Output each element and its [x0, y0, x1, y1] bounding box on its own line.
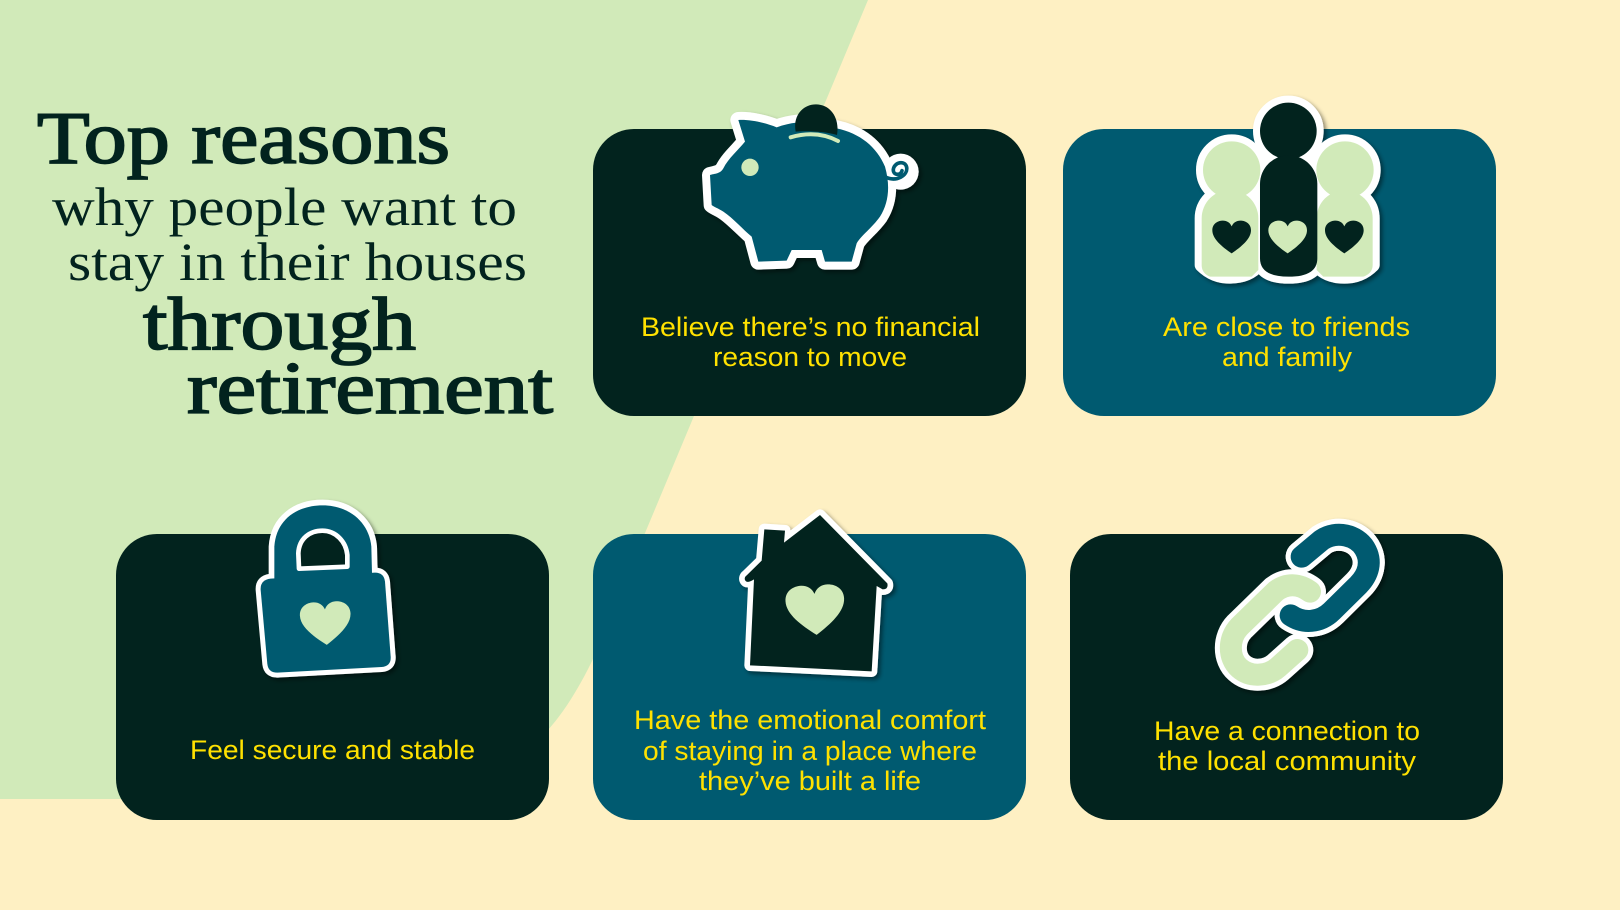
icon: house with heart	[745, 515, 888, 671]
icon: padlock with heart	[261, 505, 391, 673]
card text: reason to move	[713, 342, 907, 372]
title: retirement	[187, 348, 554, 430]
title	[37, 98, 554, 430]
icon: chain links	[1231, 535, 1369, 675]
card text: Feel secure and stable	[190, 735, 475, 765]
panel: close to friends and family	[1063, 103, 1496, 416]
title: Top reasons	[37, 98, 450, 180]
icon: family of three	[1202, 103, 1374, 277]
card text	[641, 312, 980, 372]
card text: the local community	[1158, 746, 1417, 776]
card text: Are close to friends	[1163, 312, 1410, 342]
card text: Believe there’s no financial	[641, 312, 980, 342]
panel: no financial reason to move	[593, 104, 1026, 416]
panel: connection to local community	[1070, 534, 1503, 820]
card text: of staying in a place where	[643, 736, 977, 766]
card text	[1154, 716, 1420, 776]
background: green shape	[0, 0, 868, 799]
title: stay in their houses	[68, 232, 527, 292]
title: through	[143, 283, 416, 366]
card text: Have the emotional comfort	[634, 705, 987, 735]
card text	[634, 705, 987, 796]
card text	[1163, 312, 1410, 372]
title: why people want to	[52, 177, 517, 237]
card text: they’ve built a life	[699, 766, 921, 796]
icon: piggy bank	[710, 104, 919, 262]
card text: Have a connection to	[1154, 716, 1420, 746]
panel: feel secure and stable	[116, 505, 549, 820]
panel: emotional comfort	[593, 515, 1026, 820]
card text: and family	[1222, 342, 1353, 372]
